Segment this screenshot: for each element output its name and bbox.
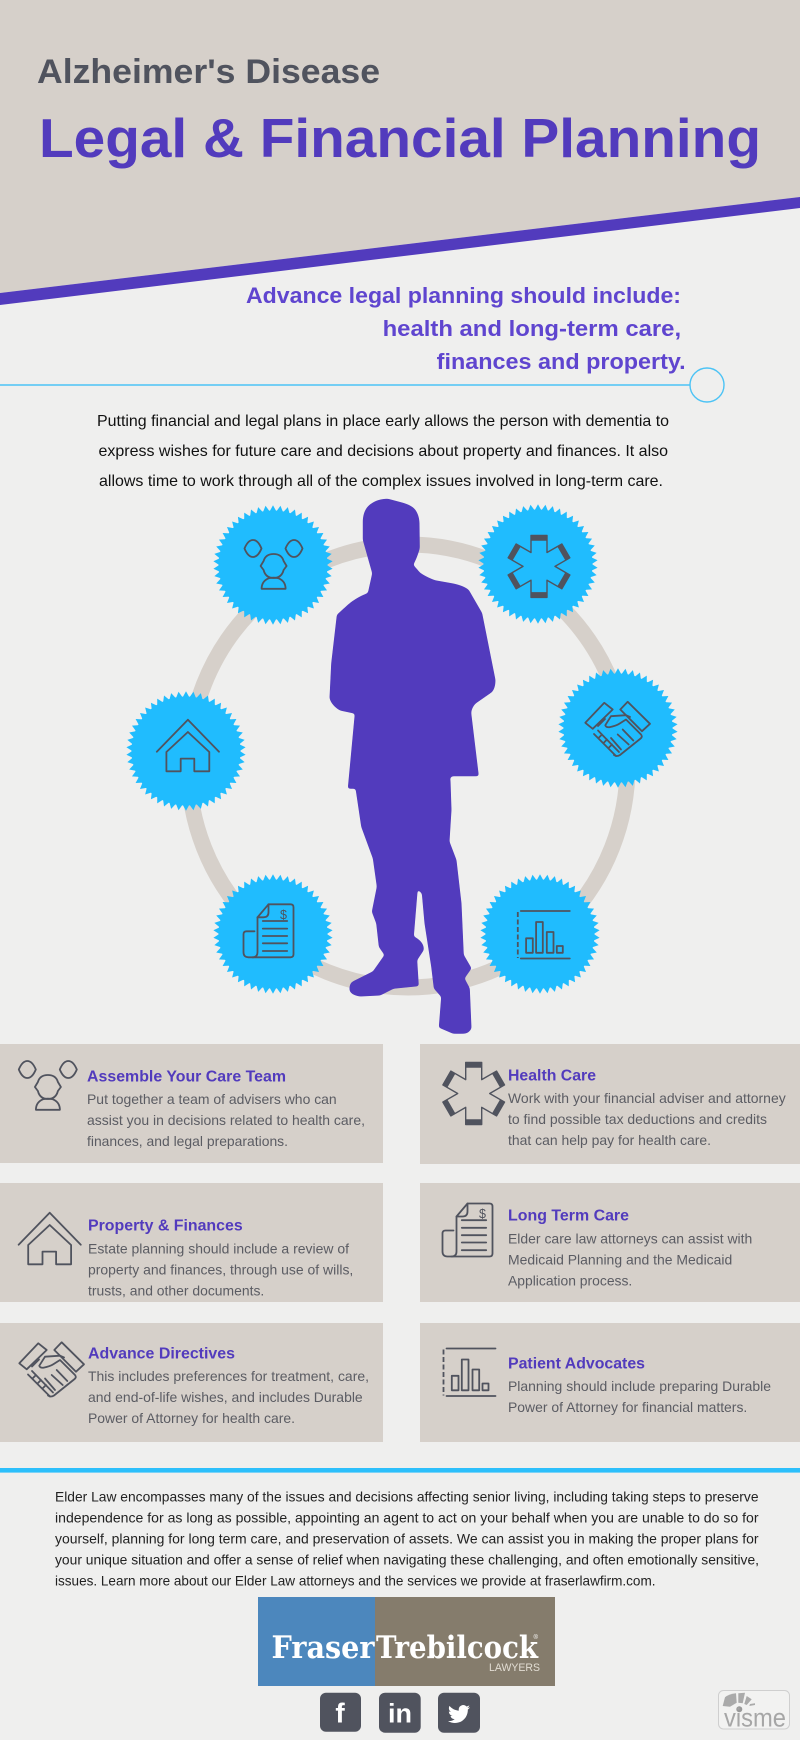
panel: patient advocates: Patient Advocates bbox=[508, 1356, 645, 1373]
logo: LAWYERS bbox=[489, 1662, 540, 1674]
panel: health care: to find possible tax deductions and credits bbox=[508, 1111, 767, 1127]
logo: ® bbox=[534, 1634, 538, 1641]
panel: advance directives: Power of Attorney for health care. bbox=[88, 1410, 295, 1426]
subheading: Advance legal planning should include: bbox=[246, 283, 681, 308]
panel: long term care: Long Term Care bbox=[508, 1208, 629, 1225]
visme badge bbox=[718, 1690, 790, 1733]
intro paragraph bbox=[97, 413, 669, 490]
panel: advance directives: Advance Directives bbox=[88, 1346, 235, 1363]
panel: long term care: Application process. bbox=[508, 1272, 632, 1288]
social icon: linkedin: in bbox=[388, 1699, 412, 1729]
panel: patient advocates: Power of Attorney for financial matters. bbox=[508, 1399, 747, 1415]
footer paragraph: independence for as long as possible, appointing an agent to act on your behalf when you are unable to do so for bbox=[55, 1510, 759, 1526]
footer paragraph: Elder Law encompasses many of the issues and decisions affecting senior living, including taking steps to preserve bbox=[55, 1489, 759, 1505]
panel: long term care: Elder care law attorneys can assist with bbox=[508, 1230, 752, 1246]
logo bbox=[258, 1597, 555, 1686]
intro paragraph: Putting financial and legal plans in place early allows the person with dementia to bbox=[97, 413, 669, 430]
visme badge: visme bbox=[724, 1703, 786, 1733]
icon: house bbox=[19, 1213, 81, 1264]
footer paragraph bbox=[55, 1489, 759, 1589]
intro paragraph: allows time to work through all of the complex issues involved in long-term care. bbox=[99, 473, 663, 490]
footer rule bbox=[0, 1468, 800, 1473]
panel: assemble your care team: Put together a team of advisers who can bbox=[87, 1091, 337, 1107]
social icon: facebook bbox=[320, 1693, 361, 1732]
panel: health care: Health Care bbox=[508, 1068, 596, 1085]
panel: advance directives bbox=[0, 1323, 383, 1442]
panel: health care bbox=[420, 1044, 800, 1164]
panel: property and finances: trusts, and other documents. bbox=[88, 1282, 264, 1298]
footer paragraph: yourself, planning for long term care, and preservation of assets. We can assist you in making the proper plans for bbox=[55, 1531, 759, 1547]
panel: advance directives: and end-of-life wishes, and includes Durable bbox=[88, 1389, 363, 1405]
badge: long term care: $ bbox=[280, 908, 287, 922]
panel: long term care bbox=[420, 1183, 800, 1302]
icon: medical star bbox=[443, 1062, 505, 1124]
panel: advance directives: This includes preferences for treatment, care, bbox=[88, 1368, 369, 1384]
panel: health care: Work with your financial adviser and attorney bbox=[508, 1090, 786, 1106]
divider line with circle bbox=[0, 368, 724, 402]
panel: property and finances: Estate planning should include a review of bbox=[88, 1240, 349, 1256]
icon: handshake bbox=[19, 1342, 84, 1396]
footer paragraph: your unique situation and offer a sense of relief when navigating these challenging, and often emotionally sensitive, bbox=[55, 1552, 759, 1568]
icon: chart bbox=[444, 1348, 496, 1396]
panel: property and finances bbox=[0, 1183, 383, 1302]
panel: property and finances: property and finances, through use of wills, bbox=[88, 1261, 353, 1277]
footer paragraph: issues. Learn more about our Elder Law attorneys and the services we provide at fraserlawfirm.com. bbox=[55, 1573, 656, 1589]
panel: assemble your care team: Assemble Your Care Team bbox=[87, 1069, 286, 1086]
icon: document: $ bbox=[479, 1207, 486, 1221]
icon: team bbox=[19, 1061, 77, 1110]
title: Legal & Financial Planning bbox=[39, 107, 761, 169]
title bbox=[37, 53, 761, 169]
icon: document bbox=[442, 1204, 492, 1256]
social icon: facebook: f bbox=[335, 1698, 345, 1729]
badge: care team bbox=[206, 498, 340, 632]
social icon: linkedin bbox=[379, 1693, 421, 1733]
badge: advance directives bbox=[551, 661, 685, 795]
logo: Trebilcock bbox=[376, 1630, 539, 1666]
panel: assemble your care team bbox=[0, 1044, 383, 1163]
panel: property and finances: Property & Finances bbox=[88, 1218, 243, 1235]
social icon: twitter bbox=[438, 1693, 480, 1733]
subheading bbox=[246, 283, 686, 374]
badge: health care bbox=[471, 497, 605, 631]
logo: Fraser bbox=[272, 1630, 375, 1666]
panel: assemble your care team: finances, and legal preparations. bbox=[87, 1133, 288, 1149]
intro paragraph: express wishes for future care and decisions about property and finances. It also bbox=[98, 443, 668, 460]
person silhouette bbox=[330, 499, 495, 1033]
header band: diagonal beige block bbox=[0, 0, 800, 305]
subheading: health and long-term care, bbox=[383, 316, 681, 341]
panel: patient advocates: Planning should include preparing Durable bbox=[508, 1378, 771, 1394]
panel: patient advocates bbox=[420, 1323, 800, 1442]
badge: property bbox=[119, 684, 253, 818]
ring bbox=[188, 544, 628, 988]
badge: patient advocates bbox=[473, 867, 607, 1001]
subheading: finances and property. bbox=[437, 349, 686, 374]
title: Alzheimer's Disease bbox=[37, 53, 380, 91]
panel: health care: that can help pay for health care. bbox=[508, 1132, 711, 1148]
panel: long term care: Medicaid Planning and the Medicaid bbox=[508, 1251, 732, 1267]
panel: assemble your care team: assist you in decisions related to health care, bbox=[87, 1112, 365, 1128]
badge: long term care bbox=[206, 867, 340, 1001]
